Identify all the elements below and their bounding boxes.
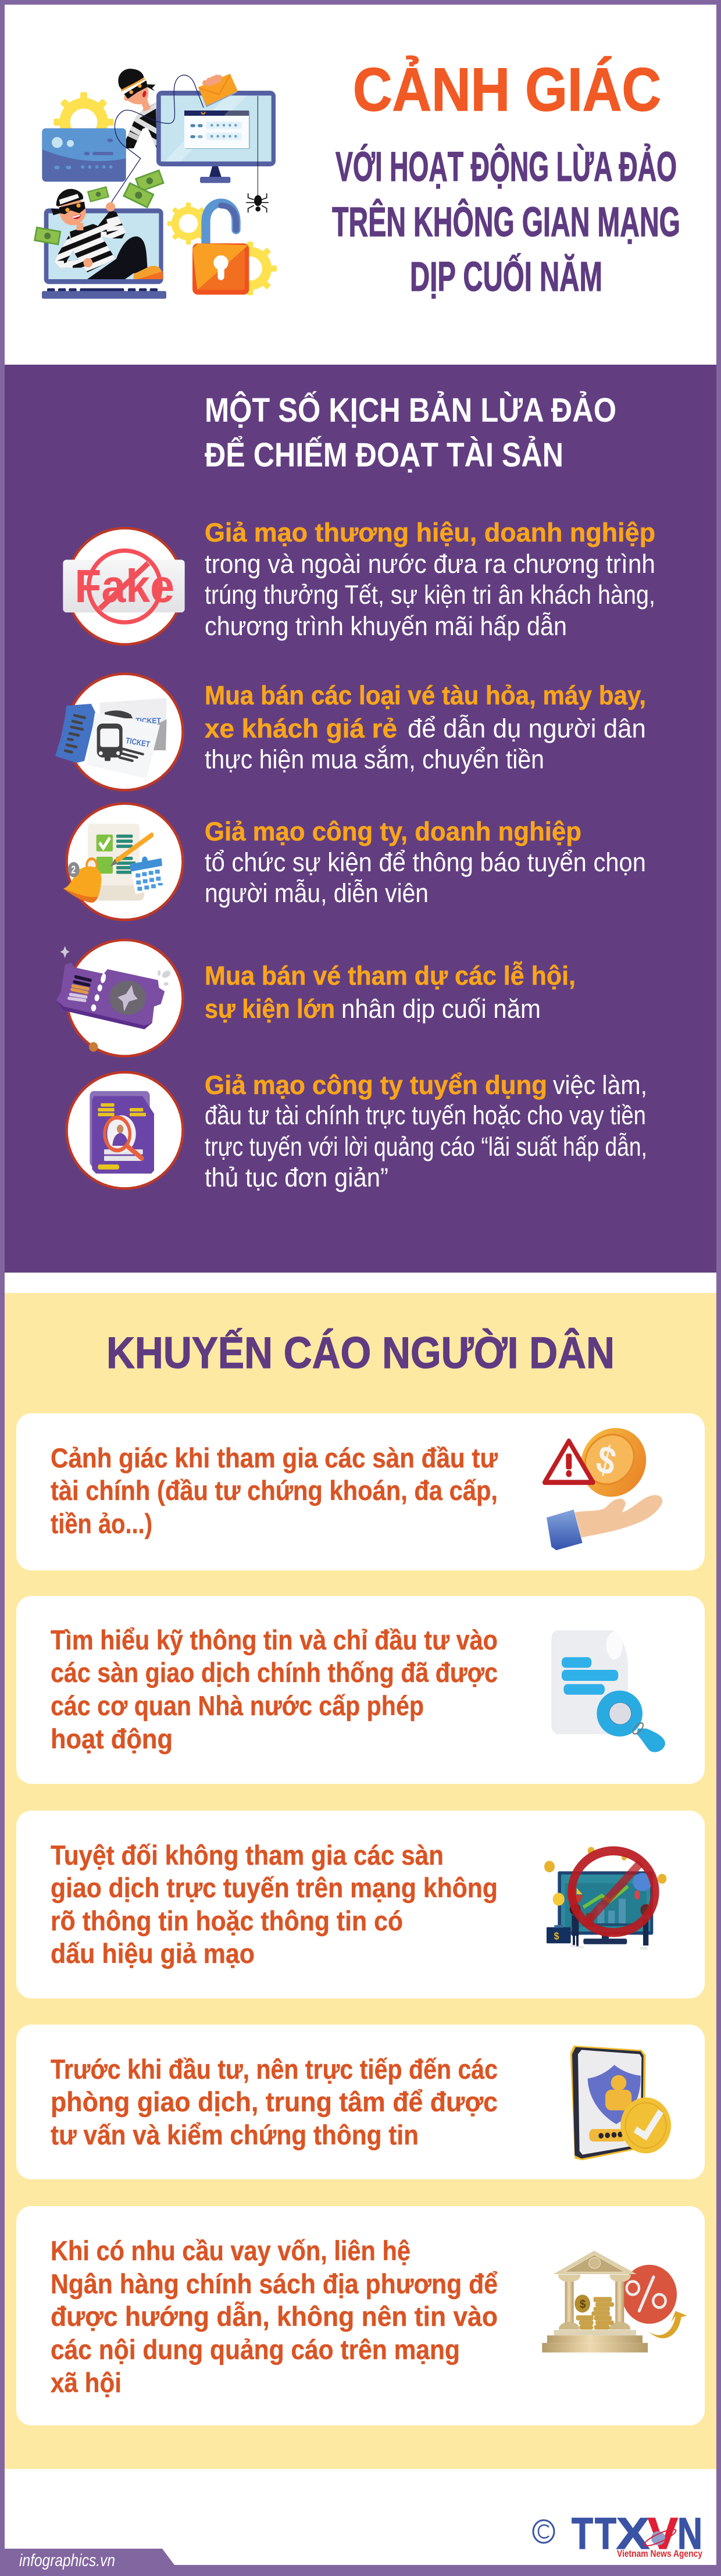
text block 5: Giả mạo công ty tuyển dụng xyxy=(205,1070,547,1100)
TTXVN logo: X xyxy=(616,2509,649,2559)
card 1: investment caution xyxy=(16,1413,705,1570)
source tab: infographics.vn: infographics.vn xyxy=(19,2551,115,2570)
title: CẢNH GIÁC: CẢNH GIÁC xyxy=(353,55,661,124)
text block 4: nhân dịp cuối năm xyxy=(341,994,541,1024)
card 2: check licensed exchanges xyxy=(16,1596,705,1784)
card 4: visit in person xyxy=(16,2025,705,2179)
card 2 text xyxy=(51,1624,498,1754)
text block 4: sự kiện lớn xyxy=(205,994,335,1024)
icon: banned trading screen: $ xyxy=(554,1930,559,1942)
icon: fake prohibited xyxy=(63,551,185,622)
card 4 text: tư vấn và kiểm chứng thông tin xyxy=(51,2119,419,2150)
text block 4: Mua bán vé tham dự các lễ hội, xyxy=(205,961,576,991)
card 5: contact local policy bank xyxy=(16,2206,705,2425)
text block 2 xyxy=(205,680,646,774)
icon: banned trading screen xyxy=(544,1847,666,1950)
icon: document and magnifier xyxy=(551,1630,665,1752)
text block 2: để dẫn dụ người dân xyxy=(408,714,646,743)
TTXVN logo xyxy=(572,2509,702,2559)
card 2 text: các cơ quan Nhà nước cấp phép xyxy=(51,1690,424,1721)
text block 5: việc làm, xyxy=(553,1070,647,1100)
card 1 text: tiền ảo...) xyxy=(51,1508,152,1539)
text block 1: trong và ngoài nước đưa ra chương trình xyxy=(205,549,655,579)
card 5 text: Khi có nhu cầu vay vốn, liên hệ xyxy=(51,2235,411,2266)
subtitle line 3: DỊP CUỐI NĂM xyxy=(410,254,602,300)
header panel xyxy=(5,5,716,365)
white gap between panels xyxy=(5,1273,716,1293)
card 5 text: xã hội xyxy=(51,2367,122,2398)
card 1 text xyxy=(51,1442,498,1539)
TTXVN logo: T xyxy=(595,2509,616,2559)
card 5 text: Ngân hàng chính sách địa phương để xyxy=(51,2268,498,2299)
text block 5: đầu tư tài chính trực tuyến hoặc cho vay tiền xyxy=(205,1100,646,1130)
icon: notice, bell and calendar: 2 xyxy=(71,864,76,876)
footer white area xyxy=(5,2469,716,2565)
icon: bus tickets: TICKET xyxy=(125,736,151,749)
scenario 4: festival tickets xyxy=(56,940,576,1056)
card 5 text xyxy=(51,2235,498,2398)
card 4 text: phòng giao dịch, trung tâm để được xyxy=(51,2086,498,2117)
TTXVN logo: V xyxy=(648,2509,678,2559)
TTXVN logo: N xyxy=(677,2509,702,2559)
copyright symbol xyxy=(533,2520,554,2543)
source tab: infographics.vn xyxy=(0,2549,174,2576)
icon: warning, coin and hand: $ xyxy=(592,1437,620,1484)
text block 3: tổ chức sự kiện để thông báo tuyển chọn xyxy=(205,847,646,877)
text block 1: Giả mạo thương hiệu, doanh nghiệp xyxy=(205,518,655,547)
text block 5: thủ tục đơn giản” xyxy=(205,1163,388,1192)
icon: notice, bell and calendar xyxy=(63,824,165,903)
text block 2: xe khách giá rẻ xyxy=(205,714,397,743)
card 3 text: Tuyệt đối không tham gia các sàn xyxy=(51,1840,444,1870)
card 1 text: tài chính (đầu tư chứng khoán, đa cấp, xyxy=(51,1475,498,1506)
text block 5 xyxy=(205,1070,647,1192)
icon: document with magnifier xyxy=(90,1091,154,1174)
icon: bank, coins and interest rate: $ xyxy=(580,2298,586,2311)
hero illustration: hackers, monitor, laptop, padlock xyxy=(35,69,277,299)
card 3: avoid unknown online exchanges xyxy=(16,1811,705,1998)
scenario 2: cheap tickets xyxy=(55,674,646,790)
text block 3: người mẫu, diễn viên xyxy=(205,878,429,908)
text block 2: thực hiện mua sắm, chuyển tiền xyxy=(205,744,544,774)
text block 3 xyxy=(205,817,646,908)
icon: bank, coins and interest rate xyxy=(542,2251,687,2353)
icon: warning, coin and hand xyxy=(545,1419,662,1550)
card 3 text xyxy=(51,1840,498,1969)
card 3 text: rõ thông tin hoặc thông tin có xyxy=(51,1905,403,1936)
scenario 5: fake recruitment xyxy=(66,1070,647,1192)
panel: scam scenarios xyxy=(5,365,716,1273)
TTXVN logo: T xyxy=(572,2509,593,2559)
text block 3: Giả mạo công ty, doanh nghiệp xyxy=(205,817,581,846)
card 3 text: giao dịch trực tuyến trên mạng không xyxy=(51,1872,498,1903)
card 1 text: Cảnh giác khi tham gia các sàn đầu tư xyxy=(51,1442,498,1473)
card 4 text: Trước khi đầu tư, nên trực tiếp đến các xyxy=(51,2054,498,2085)
scenarios heading: ĐỂ CHIẾM ĐOẠT TÀI SẢN xyxy=(205,436,563,474)
icon: bus tickets: TICKET xyxy=(135,716,161,725)
icon: bus tickets xyxy=(55,698,167,778)
scenarios heading xyxy=(205,391,616,474)
card 2 text: các sàn giao dịch chính thống đã được xyxy=(51,1657,498,1688)
TTXVN logo: Vietnam News Agency xyxy=(617,2548,702,2559)
recommendations heading: KHUYẾN CÁO NGƯỜI DÂN xyxy=(106,1328,615,1378)
card 2 text: Tìm hiểu kỹ thông tin và chỉ đầu tư vào xyxy=(51,1624,498,1655)
text block 1 xyxy=(205,518,655,641)
icon: fake prohibited: Fake xyxy=(74,560,174,612)
text block 2: Mua bán các loại vé tàu hỏa, máy bay, xyxy=(205,680,646,710)
icon: phone with shield and check xyxy=(570,2046,671,2160)
panel: recommendations xyxy=(5,1293,716,2469)
icon: event ticket xyxy=(56,946,171,1052)
card 5 text: được hướng dẫn, không nên tin vào xyxy=(51,2301,498,2332)
scenario 1: fake brands xyxy=(63,518,655,644)
bottom strip xyxy=(0,2565,721,2576)
scenario 3: fake companies' events xyxy=(63,804,646,920)
card 5 text: các nội dung quảng cáo trên mạng xyxy=(51,2334,460,2365)
card 4 text xyxy=(51,2054,498,2150)
scenarios heading: MỘT SỐ KỊCH BẢN LỪA ĐẢO xyxy=(205,391,616,429)
text block 1: chương trình khuyến mãi hấp dẫn xyxy=(205,611,567,641)
text block 4 xyxy=(205,961,576,1024)
text block 1: trúng thưởng Tết, sự kiện tri ân khách hàng, xyxy=(205,580,655,610)
card 3 text: dấu hiệu giả mạo xyxy=(51,1938,255,1969)
card 2 text: hoạt động xyxy=(51,1723,173,1754)
